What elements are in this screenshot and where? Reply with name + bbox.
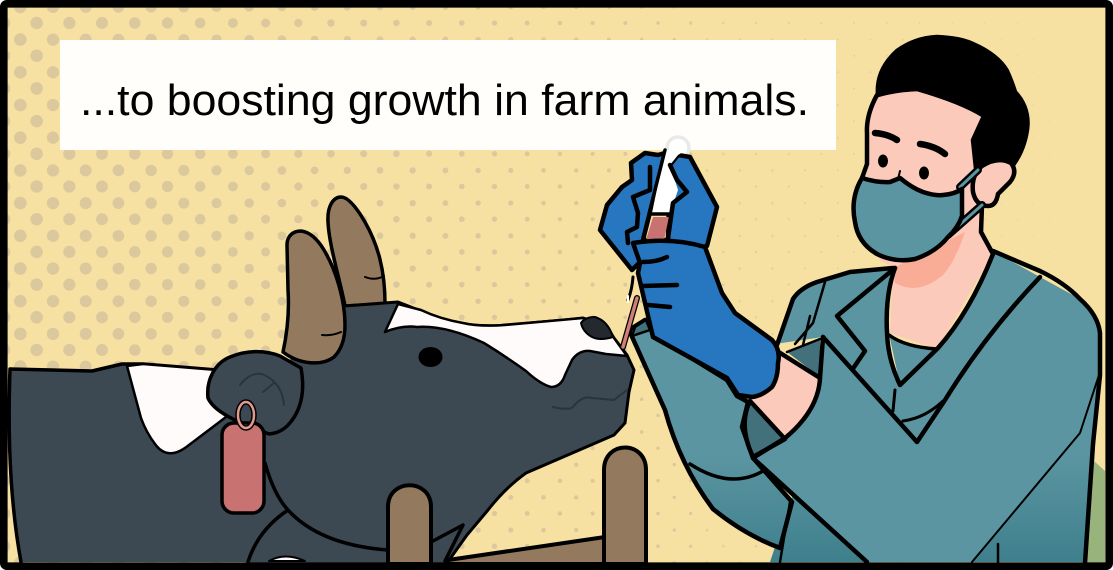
cow body: [10, 364, 448, 562]
cow ear: [208, 352, 303, 434]
dark sleeve under glove: [632, 320, 650, 336]
neck shadow: [893, 232, 965, 288]
cow back horn: [328, 197, 385, 306]
ear: [973, 160, 1014, 206]
white upper swab: [652, 150, 686, 214]
white chest marking: [269, 556, 305, 561]
ear tag: [222, 423, 264, 513]
back arm sleeve: [629, 320, 792, 548]
sleeve fold line: [690, 464, 763, 479]
mask straps: [948, 170, 982, 235]
lower cuff shadow: [745, 401, 785, 457]
tag ring: [238, 402, 254, 428]
cow eye: [418, 347, 442, 367]
scrubs chest and shoulders: [775, 251, 1040, 442]
placket lines: [893, 390, 943, 421]
wooden fence: [388, 448, 646, 564]
hair: [878, 37, 1028, 178]
shoulder seam lines: [795, 282, 825, 345]
right shoulder outline: [993, 251, 1100, 563]
cow nose: [581, 317, 613, 339]
scrubs lower torso: [770, 375, 1100, 562]
eyebrows: [875, 133, 945, 154]
torso lines: [780, 502, 998, 563]
fence post left: [388, 485, 431, 564]
white patch on back: [127, 364, 226, 453]
caption box: [60, 40, 836, 150]
veterinarian: [600, 37, 1100, 563]
shirt neckline: [889, 334, 937, 385]
neck and face skin: [862, 80, 993, 349]
eyes: [878, 154, 929, 180]
neck and chest outlines: [248, 463, 463, 562]
neck v collar: [887, 254, 993, 385]
upper cuff shadow: [787, 339, 820, 377]
white blaze on the face: [385, 304, 627, 387]
glove finger lines: [627, 165, 687, 243]
swab stick: [623, 298, 637, 347]
head top and jaw outline: [344, 302, 634, 563]
swab tip: [667, 137, 689, 159]
fence post right: [604, 448, 646, 564]
face mask: [854, 178, 962, 260]
cow mouth line: [553, 390, 627, 409]
cow head and neck: [250, 300, 634, 563]
left lapel: [837, 268, 895, 370]
nose: [898, 171, 900, 179]
glove knuckle lines: [642, 257, 677, 307]
back hand glove: [600, 153, 717, 270]
red tube fill: [646, 217, 669, 240]
fence rail: [448, 537, 605, 564]
cow: [9, 197, 634, 563]
swab stick holder: [628, 277, 633, 300]
back of chair: [1087, 461, 1105, 563]
arm underside line: [972, 375, 1099, 562]
sleeve cuff edge: [753, 337, 867, 562]
main forearm sleeve: [753, 277, 1100, 562]
front hand glove: [633, 241, 779, 397]
cow front horn: [283, 231, 345, 363]
exposed forearm: [750, 352, 820, 437]
cuff line: [777, 351, 820, 378]
caption text: ...to boosting growth in farm animals.: [80, 76, 809, 125]
